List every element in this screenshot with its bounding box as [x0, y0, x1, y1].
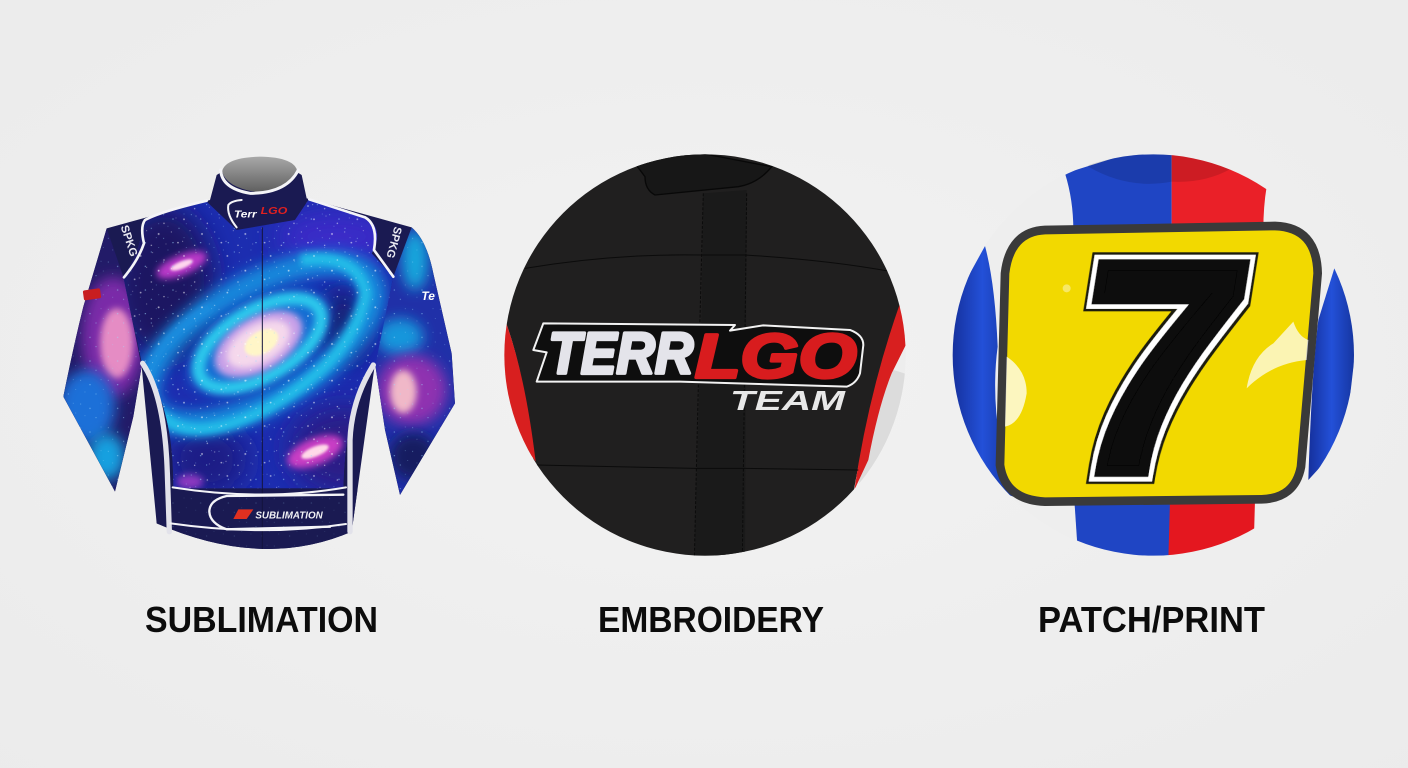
- gloss highlights: [1005, 284, 1308, 427]
- panel: sublimation jacket: SUBLIMATION: [255, 511, 323, 522]
- team label: TEAM: [730, 385, 846, 416]
- centre zip: [262, 227, 263, 549]
- number 7: 7: [1048, 200, 1267, 535]
- black suit fabric: [506, 154, 900, 556]
- logo wordmark: TERR: [548, 321, 693, 386]
- heading: sublimation: SUBLIMATION: [145, 599, 378, 640]
- panel: patch close-up: [945, 140, 1365, 560]
- collar logo: [234, 206, 288, 220]
- panel: embroidery close-up: [495, 140, 915, 560]
- panel: sublimation jacket: [63, 156, 455, 549]
- heading: patch/print: PATCH/PRINT: [1038, 599, 1265, 640]
- red side panels: [504, 324, 536, 462]
- stitch lines: [525, 193, 892, 560]
- collar logo: LGO: [261, 206, 288, 217]
- bottom stripes: [1074, 504, 1170, 556]
- left sleeve print: [64, 228, 142, 492]
- placket: [696, 552, 745, 556]
- belt panel: [156, 490, 358, 549]
- heading: embroidery: EMBROIDERY: [598, 599, 824, 640]
- nebulae: [153, 246, 210, 284]
- collar tab: [635, 154, 772, 195]
- white piping: [124, 170, 393, 532]
- top stripes: [1065, 154, 1172, 226]
- side stripes: [952, 246, 1013, 497]
- shoulder marks: SPKG: [118, 224, 139, 258]
- spiral arms: [140, 242, 392, 444]
- white side panels: [495, 140, 915, 560]
- sleeve marks: [83, 288, 101, 300]
- logo wordmark: LGO: [695, 322, 857, 391]
- right sleeve print: [376, 228, 455, 495]
- collar interior: [222, 157, 297, 193]
- logo backing: [533, 323, 863, 387]
- yellow patch: [1000, 226, 1318, 502]
- jacket base: [63, 172, 455, 549]
- belt stars: [172, 498, 346, 546]
- collar logo: Terr: [234, 209, 258, 220]
- panel: sublimation jacket: SPKG: [383, 225, 403, 260]
- torso galaxy print: [124, 200, 393, 488]
- panel: sublimation jacket: Te: [421, 289, 435, 303]
- white base: [945, 140, 1365, 560]
- belt logo: [233, 509, 253, 519]
- logo wordmark: [548, 321, 857, 391]
